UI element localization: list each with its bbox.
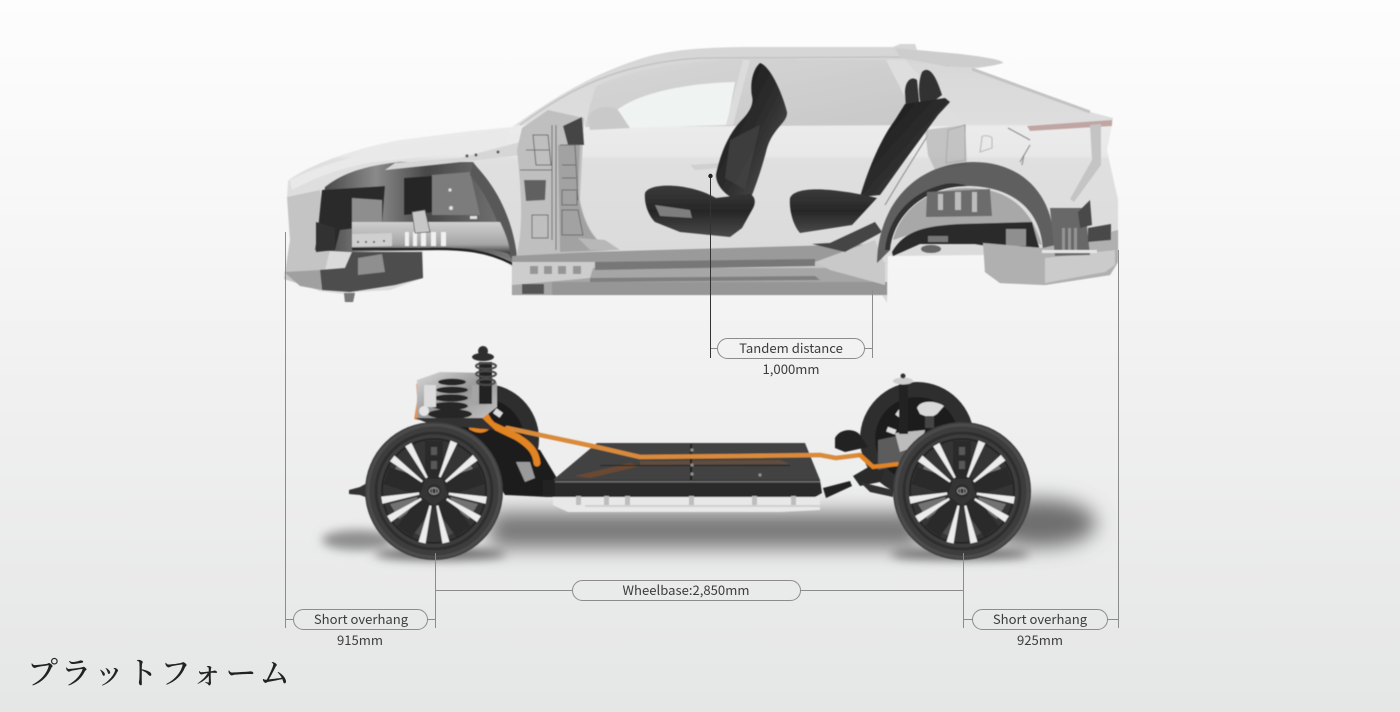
front engine bay structure xyxy=(315,142,522,302)
rear seat cushion xyxy=(790,189,877,233)
platform chassis xyxy=(349,346,1031,560)
title: プラットフォーム xyxy=(27,648,293,693)
front overhang label: 915mm xyxy=(337,630,383,649)
sill holes xyxy=(530,266,581,274)
side windows xyxy=(585,59,915,127)
chassis ground shadow xyxy=(322,499,1096,560)
rear arm block xyxy=(853,465,885,486)
cable end xyxy=(860,455,897,467)
seat highlight xyxy=(725,125,760,190)
rear suspension xyxy=(823,374,944,498)
pillar dark top xyxy=(563,117,584,145)
A-pillar and side structure xyxy=(516,110,620,258)
pillar dark stamping xyxy=(524,180,546,201)
rear floor dark xyxy=(812,222,882,252)
seams xyxy=(600,444,790,480)
tower bolts xyxy=(448,188,477,219)
shock xyxy=(899,384,908,434)
tray pins xyxy=(576,496,796,505)
tandem distance pointer xyxy=(708,174,713,358)
front member xyxy=(316,222,335,252)
coil cap xyxy=(917,402,944,418)
sill and floor xyxy=(512,222,887,295)
floor band xyxy=(512,244,870,262)
rear crossmember xyxy=(892,222,1042,258)
left wheel contact xyxy=(374,548,506,560)
battery side xyxy=(545,480,822,497)
lower bumper xyxy=(284,270,322,290)
lower rail edge xyxy=(352,249,518,267)
radiator support xyxy=(320,252,423,292)
door mirror xyxy=(588,107,630,130)
front overhang label: Short overhang xyxy=(314,609,409,628)
sill jack point xyxy=(522,284,544,294)
rail ribs xyxy=(405,232,446,246)
tray shade xyxy=(585,505,820,507)
rear seat xyxy=(790,70,950,233)
inner dark stamping xyxy=(926,189,992,217)
upper rear structure xyxy=(885,125,1030,205)
battery front foot xyxy=(543,480,555,496)
light panel xyxy=(352,198,382,222)
floor bracket xyxy=(578,238,620,250)
cowl bolts xyxy=(466,150,500,158)
tandem distance label xyxy=(718,338,864,378)
rear wheel arch structure xyxy=(877,125,1118,285)
sill mid bands xyxy=(595,259,815,270)
front suspension arms xyxy=(490,435,558,497)
cowl xyxy=(385,142,522,170)
battery bolts xyxy=(690,448,762,477)
motor dark coil xyxy=(428,379,472,419)
front overhang label xyxy=(294,609,428,649)
sill front box xyxy=(512,262,595,285)
suspension tower xyxy=(404,176,434,215)
front strut xyxy=(472,346,496,404)
window pillar xyxy=(726,60,750,125)
front seat xyxy=(645,63,787,237)
strut mount xyxy=(412,210,430,233)
rear motor xyxy=(878,430,925,470)
front seat backrest xyxy=(716,63,787,200)
rear overhang label: Short overhang xyxy=(993,609,1088,628)
battery pack xyxy=(543,443,822,512)
left shadow xyxy=(322,530,394,550)
rear-side far wheel (right) xyxy=(860,382,974,496)
front motor unit xyxy=(415,372,497,430)
rear seat headrests xyxy=(905,70,942,110)
inner arch panel xyxy=(893,188,1042,245)
reflection xyxy=(575,463,640,478)
crossmember light plate xyxy=(1006,229,1026,246)
sill panel xyxy=(512,262,885,295)
rear overhang label xyxy=(972,609,1108,649)
bay interior xyxy=(315,162,518,266)
dimension lines xyxy=(285,232,1118,628)
far wheel (left) xyxy=(429,384,539,494)
front seat cushion xyxy=(645,186,755,237)
rear hatch pillar xyxy=(1070,124,1101,202)
car body shell xyxy=(284,44,1118,303)
rear bumper xyxy=(983,230,1118,285)
tandem distance label: 1,000mm xyxy=(763,359,819,378)
pillar outline details xyxy=(520,125,583,250)
left outrigger xyxy=(349,483,368,498)
rear seat backrest xyxy=(860,98,950,197)
door handle xyxy=(690,162,735,170)
sill lower xyxy=(552,282,887,295)
spoiler xyxy=(895,48,1003,67)
radiator light block xyxy=(358,254,385,275)
pillar brackets xyxy=(925,125,967,170)
broad shadow xyxy=(490,512,920,548)
rear glass edge xyxy=(972,69,1090,112)
front near wheel xyxy=(365,422,503,560)
rear end beam xyxy=(1088,224,1111,242)
rail bracket xyxy=(352,233,392,247)
right wheel contact xyxy=(890,548,1030,560)
pillar side strip xyxy=(558,145,610,252)
roof line xyxy=(520,57,950,125)
rear blob xyxy=(835,430,868,452)
outer arch xyxy=(877,162,1054,263)
hood highlight xyxy=(290,128,510,190)
seat adjuster xyxy=(655,205,692,218)
rear bottom slat xyxy=(1042,250,1097,253)
sill light band xyxy=(512,262,885,268)
tower panel xyxy=(432,172,480,215)
tow piece xyxy=(344,293,355,302)
rear overhang label: 925mm xyxy=(1017,630,1063,649)
front rail xyxy=(352,222,510,254)
outer body silhouette xyxy=(284,44,1118,303)
wheel arch dark band xyxy=(470,163,518,266)
right shadow xyxy=(984,499,1096,547)
rear near wheel xyxy=(893,422,1031,560)
wheelbase label xyxy=(572,580,800,600)
front bumper xyxy=(284,190,330,290)
battery top face xyxy=(553,443,820,480)
pillar panel xyxy=(516,110,616,258)
wheelbase label: Wheelbase:2,850mm xyxy=(623,580,749,599)
front crash frame xyxy=(316,186,385,250)
orange high-voltage cable xyxy=(416,385,897,467)
rear floor rise xyxy=(815,240,885,285)
lower base xyxy=(415,418,495,430)
lower arm xyxy=(860,482,893,497)
suspension mount xyxy=(921,245,941,253)
bumper light lobe xyxy=(1045,250,1115,283)
battery tray xyxy=(553,497,820,512)
rear bumper beam xyxy=(1050,208,1090,256)
rear arm upper xyxy=(823,481,852,498)
front door glass xyxy=(617,82,735,128)
tandem distance label: Tandem distance xyxy=(739,338,843,357)
rear quarter light xyxy=(886,60,965,126)
battery seam xyxy=(553,481,820,482)
arch highlight xyxy=(885,183,967,250)
tail light xyxy=(1027,120,1112,131)
